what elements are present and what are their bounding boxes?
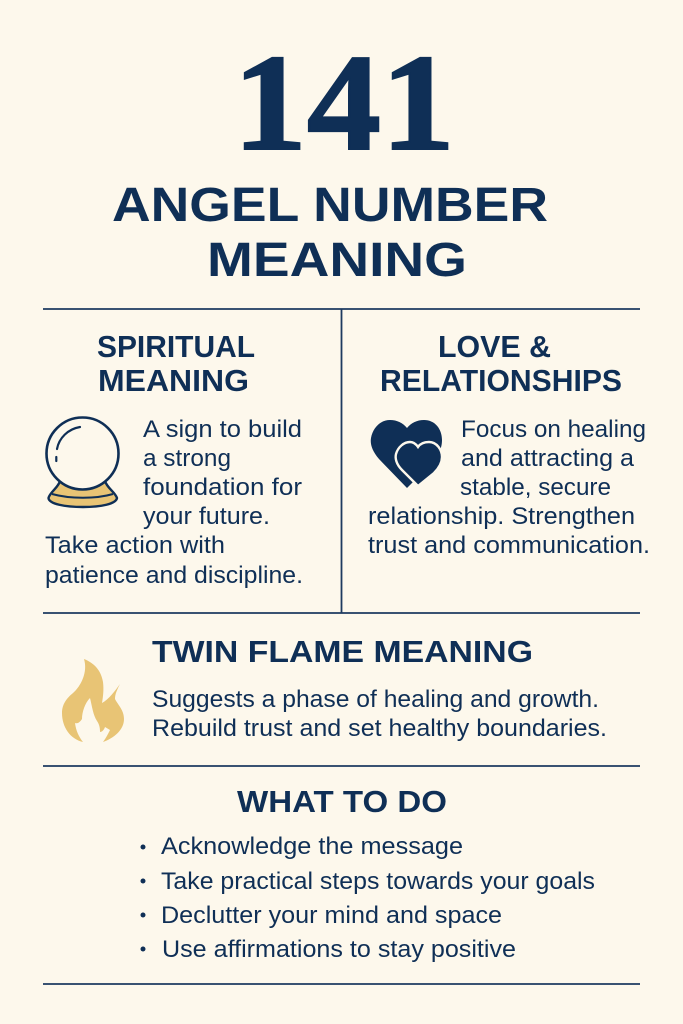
text: love and relationships: relationship. Strengthen [368, 503, 635, 530]
heading: what to do: WHAT TO DO [237, 784, 447, 819]
text: twin flame meaning: Suggests a phase of healing and growth. [152, 686, 599, 713]
icon: two hearts [371, 420, 442, 488]
text: love and relationships [368, 416, 650, 559]
heading: love and relationships [380, 329, 622, 398]
heading: spiritual meaning [97, 329, 255, 398]
heading: love and relationships: RELATIONSHIPS [380, 363, 622, 398]
text: spiritual meaning: your future. [143, 503, 270, 530]
text: spiritual meaning: Take action with [45, 532, 225, 559]
bullet list: Use affirmations to stay positive [162, 936, 516, 963]
title line 1: ANGEL NUMBER [112, 179, 548, 232]
number 141: 141 [233, 26, 455, 179]
heading: twin flame meaning: TWIN FLAME MEANING [152, 634, 533, 669]
text: spiritual meaning: A sign to build [143, 416, 302, 443]
panel: what to do [140, 784, 595, 963]
text: love and relationships: and attracting a [461, 445, 635, 472]
icon: crystal ball [46, 418, 118, 507]
bullet list: Declutter your mind and space [161, 902, 502, 929]
text: love and relationships: Focus on healing [461, 416, 646, 443]
text: spiritual meaning: foundation for [143, 474, 302, 501]
bullet list: Take practical steps towards your goals [161, 868, 595, 895]
text: spiritual meaning: patience and discipline. [45, 562, 303, 589]
text: spiritual meaning: a strong [143, 445, 231, 472]
bullet list: Acknowledge the message [161, 833, 463, 860]
text: spiritual meaning [45, 416, 303, 589]
text: twin flame meaning [152, 686, 607, 742]
heading: spiritual meaning: MEANING [98, 363, 249, 398]
title line 2: MEANING [207, 234, 467, 287]
heading: spiritual meaning: SPIRITUAL [97, 329, 255, 364]
panel: spiritual meaning [45, 329, 303, 589]
icon: flame [62, 659, 124, 742]
text: love and relationships: trust and communication. [368, 532, 650, 559]
text: love and relationships: stable, secure [460, 474, 611, 501]
panel: love and relationships [368, 329, 650, 559]
heading: love and relationships: LOVE & [438, 329, 551, 364]
panel: twin flame meaning [62, 634, 607, 742]
text: twin flame meaning: Rebuild trust and set healthy boundaries. [152, 715, 607, 742]
title [112, 26, 548, 287]
bullet list [140, 833, 595, 963]
